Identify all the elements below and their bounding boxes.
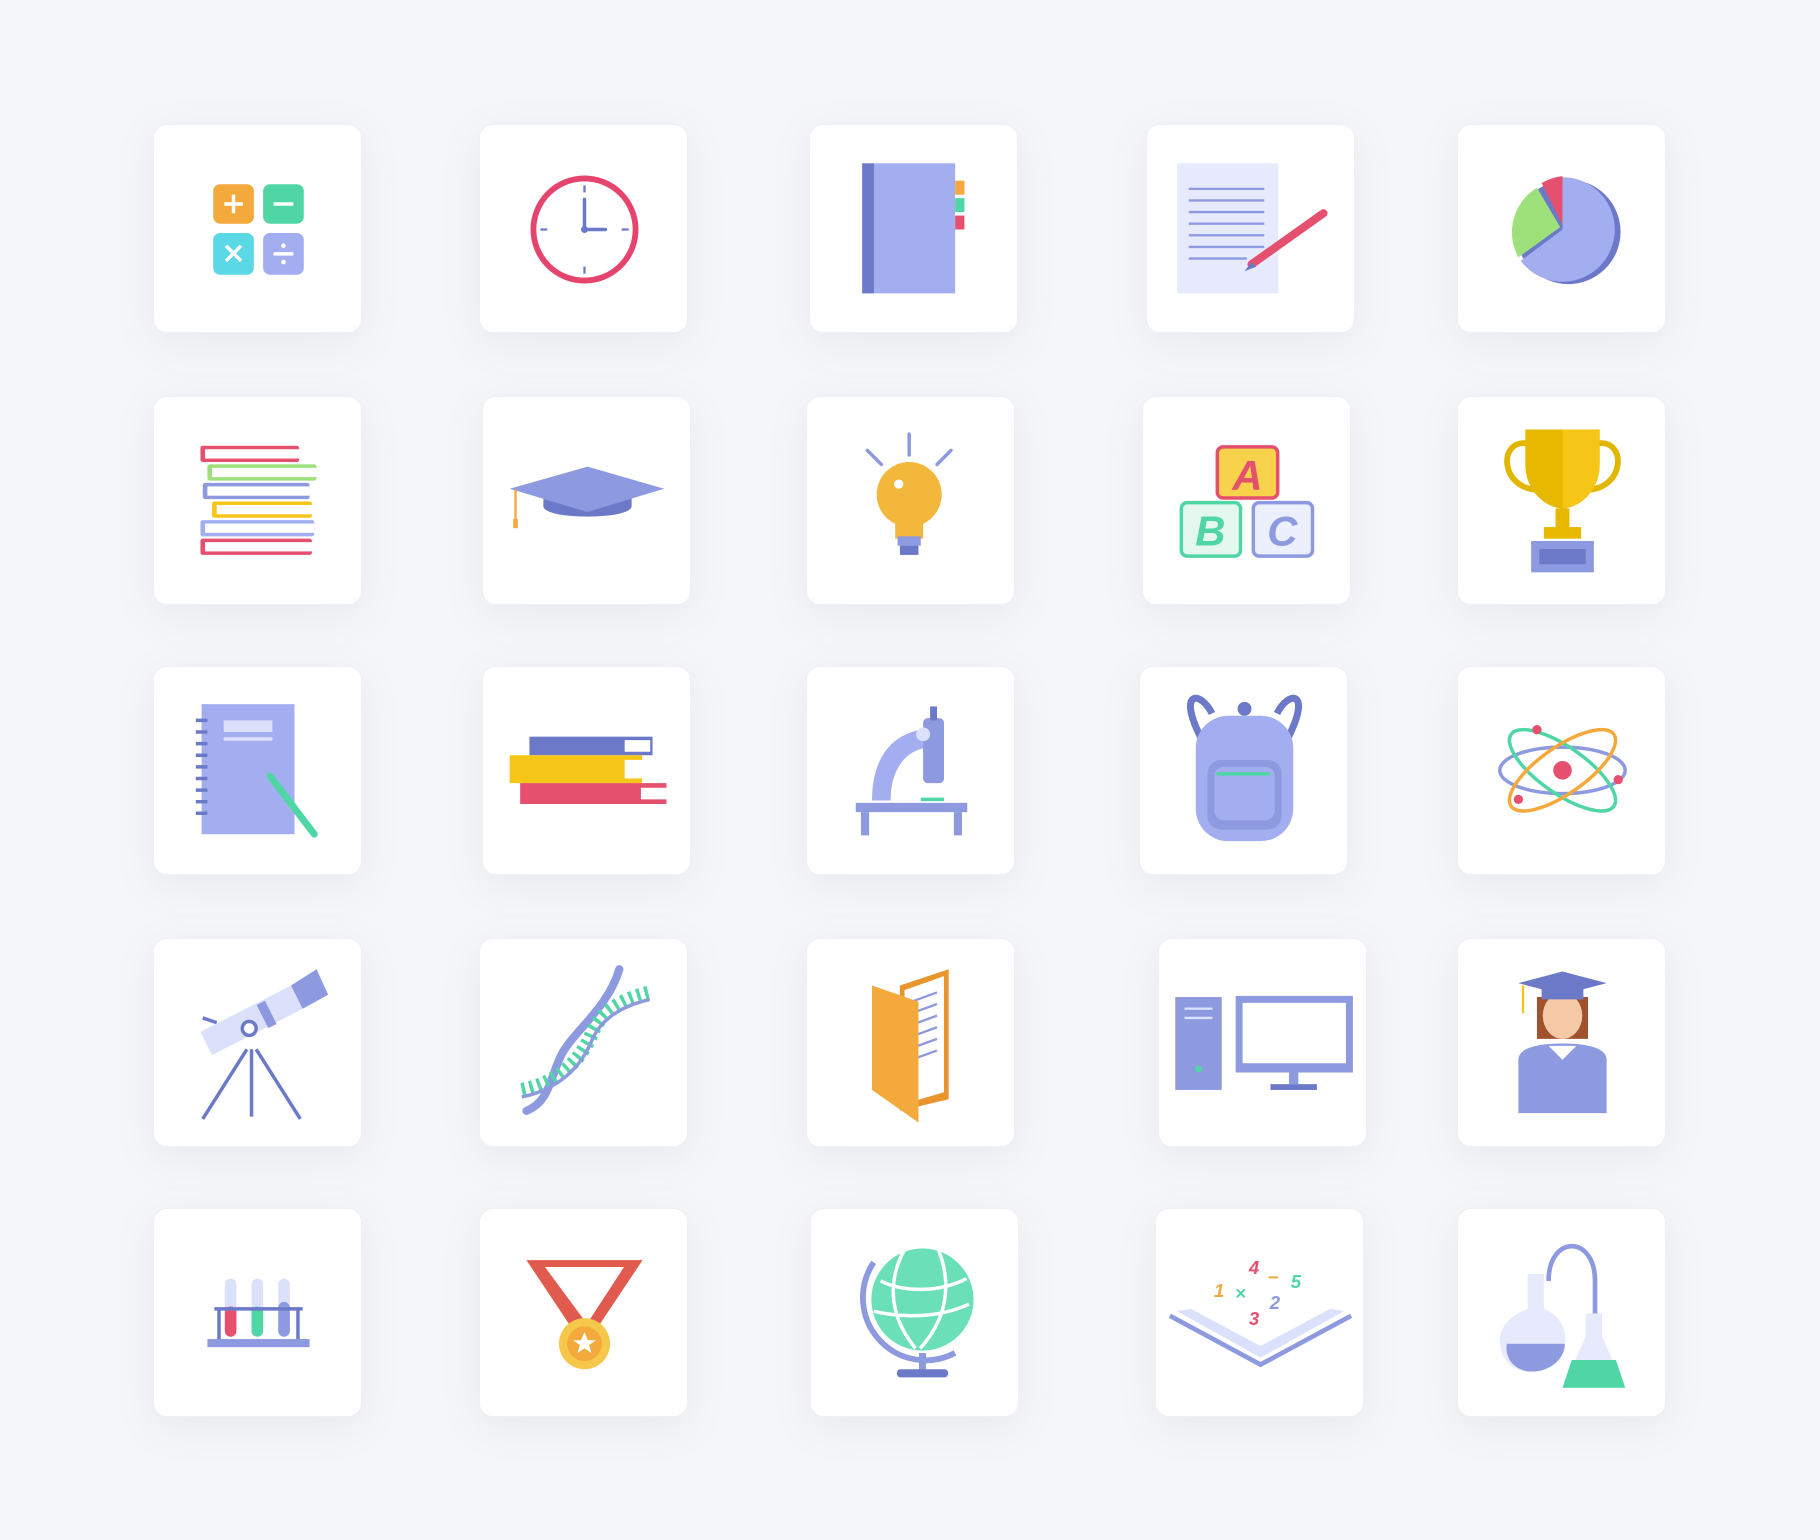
card: open book with numbers: − xyxy=(1267,1266,1278,1287)
card: chemistry flasks xyxy=(1457,1208,1666,1417)
card: atom xyxy=(1457,666,1666,875)
card: microscope xyxy=(806,666,1015,875)
card: open book with numbers: 3 xyxy=(1249,1308,1260,1329)
card: ABC blocks: C xyxy=(1267,508,1298,555)
card: open book with numbers: × xyxy=(1235,1283,1246,1304)
card: medal xyxy=(479,1208,688,1417)
card: open book with numbers: 5 xyxy=(1291,1271,1302,1292)
card: notebook xyxy=(809,124,1018,333)
card: calculator xyxy=(153,124,362,333)
card: open book with numbers: 1 xyxy=(1214,1280,1224,1301)
card: pie chart xyxy=(1457,124,1666,333)
card: test tubes xyxy=(153,1208,362,1417)
card: document with pencil xyxy=(1146,124,1355,333)
card: ABC blocks: A xyxy=(1231,452,1263,499)
card: horizontal books xyxy=(482,666,691,875)
card: open book with numbers xyxy=(1155,1208,1364,1417)
card: telescope xyxy=(153,938,362,1147)
card: book stack xyxy=(153,396,362,605)
card: ABC blocks xyxy=(1142,396,1351,605)
card: desktop computer xyxy=(1158,938,1367,1147)
card: folder xyxy=(806,938,1015,1147)
card: spiral notebook xyxy=(153,666,362,875)
card: graduation cap xyxy=(482,396,691,605)
card: backpack xyxy=(1139,666,1348,875)
card: clock xyxy=(479,124,688,333)
card: ABC blocks: B xyxy=(1195,508,1225,555)
card: light bulb xyxy=(806,396,1015,605)
card: graduate xyxy=(1457,938,1666,1147)
card: globe xyxy=(810,1208,1019,1417)
card: DNA xyxy=(479,938,688,1147)
card: open book with numbers: 4 xyxy=(1248,1257,1259,1278)
card: open book with numbers: 2 xyxy=(1269,1292,1281,1313)
card: trophy xyxy=(1457,396,1666,605)
